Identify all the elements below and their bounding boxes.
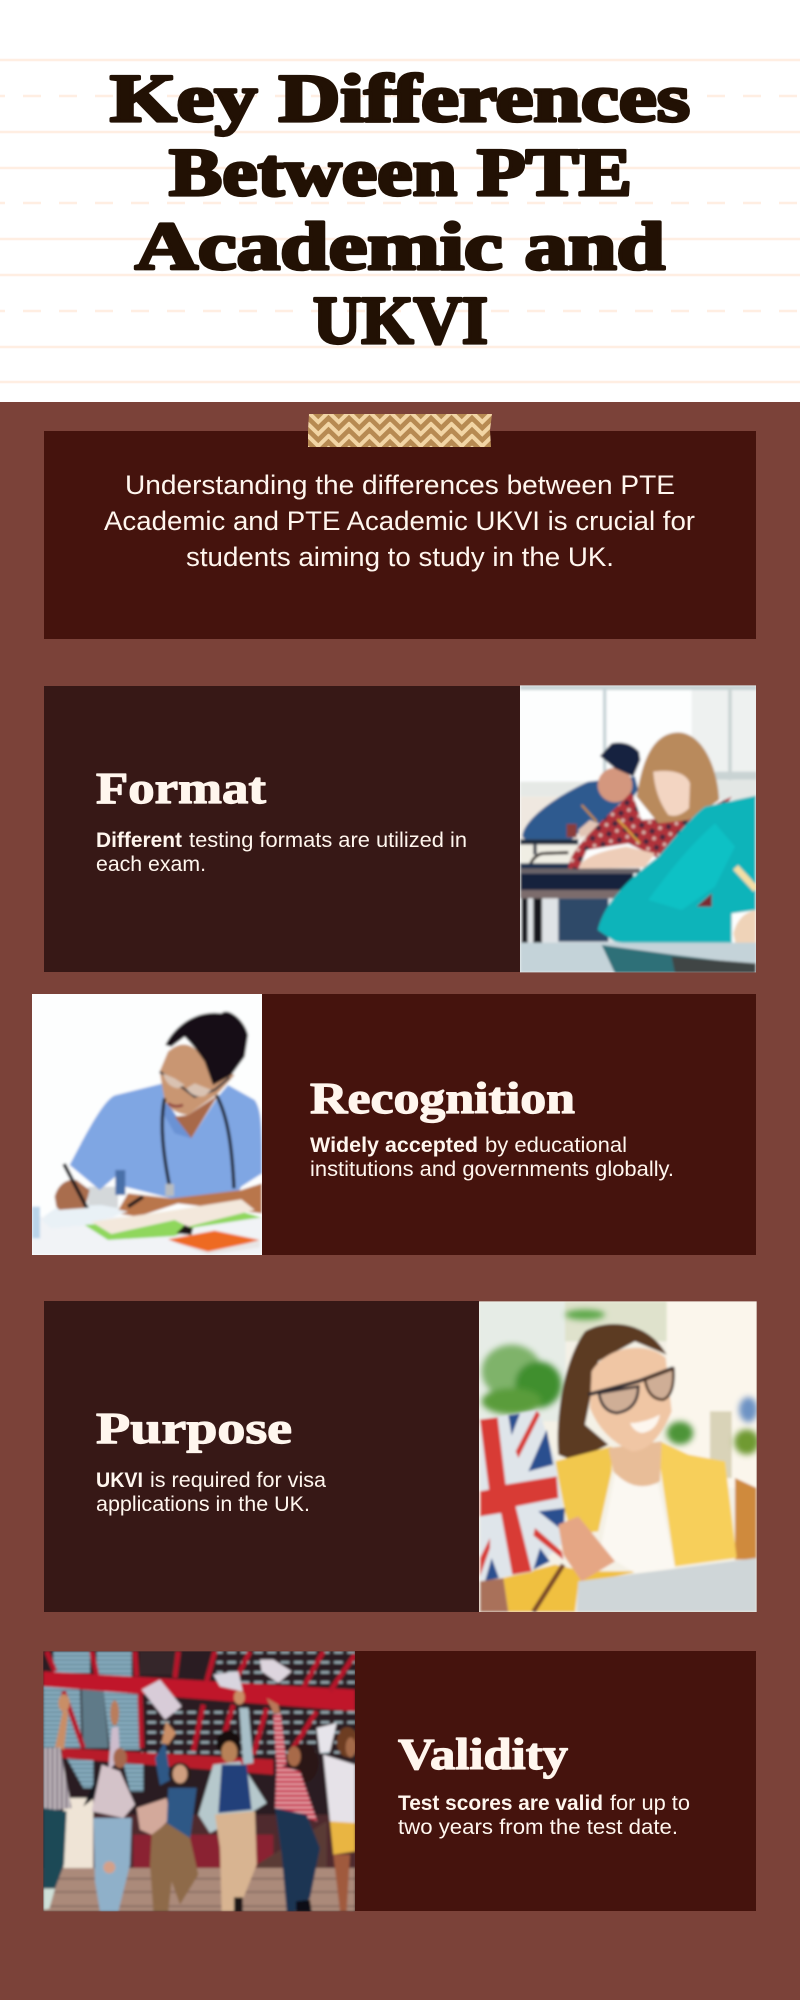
panel: format: [44, 680, 762, 977]
panel: validity: [40, 1648, 756, 1915]
format heading: Format: [96, 764, 266, 813]
title: Key Differences: [110, 60, 690, 136]
intro text: students aiming to study in the UK.: [186, 542, 614, 572]
intro text: Understanding the differences between PTE: [125, 470, 675, 500]
purpose body text: applications in the UK.: [96, 1493, 310, 1516]
format background: [44, 686, 520, 972]
format body text: [96, 829, 467, 876]
validity body text: [398, 1792, 690, 1839]
photo: smiling woman holding a UK flag notebook: [475, 1298, 762, 1615]
purpose body text: UKVI: [96, 1469, 143, 1492]
format body text: each exam.: [96, 853, 206, 876]
validity body text: two years from the test date.: [398, 1816, 678, 1839]
title: UKVI: [313, 282, 488, 358]
validity background: [355, 1651, 756, 1911]
panel: recognition: [28, 990, 756, 1260]
title: Between PTE: [169, 134, 632, 210]
photo: nurse studying at a desk: [28, 990, 268, 1260]
panel: introduction: [44, 414, 756, 639]
intro text: Academic and PTE Academic UKVI is crucial for: [104, 506, 695, 536]
intro background: [44, 431, 756, 639]
header band with ruled notebook lines: [0, 0, 800, 402]
format body text: Different: [96, 829, 182, 852]
purpose body text: is required for visa: [150, 1469, 326, 1492]
washi tape with chevrons: [308, 414, 492, 447]
photo: students jumping and throwing papers: [40, 1648, 360, 1915]
validity body text: Test scores are valid: [398, 1792, 603, 1815]
purpose heading: Purpose: [96, 1404, 292, 1453]
title: [110, 60, 690, 358]
recognition body text: [310, 1134, 674, 1181]
purpose background: [44, 1301, 479, 1612]
validity heading: Validity: [398, 1730, 568, 1779]
recognition body text: by educational: [485, 1134, 627, 1157]
title: Academic and: [135, 208, 665, 284]
validity body text: for up to: [610, 1792, 690, 1815]
recognition body text: institutions and governments globally.: [310, 1158, 674, 1181]
panel: purpose: [44, 1298, 762, 1615]
format body text: testing formats are utilized in: [189, 829, 467, 852]
photo: students writing an exam: [515, 680, 762, 977]
purpose body text: [96, 1469, 326, 1516]
recognition body text: Widely accepted: [310, 1134, 478, 1157]
intro text: [104, 470, 695, 572]
recognition heading: Recognition: [310, 1074, 575, 1123]
recognition background: [262, 994, 756, 1255]
